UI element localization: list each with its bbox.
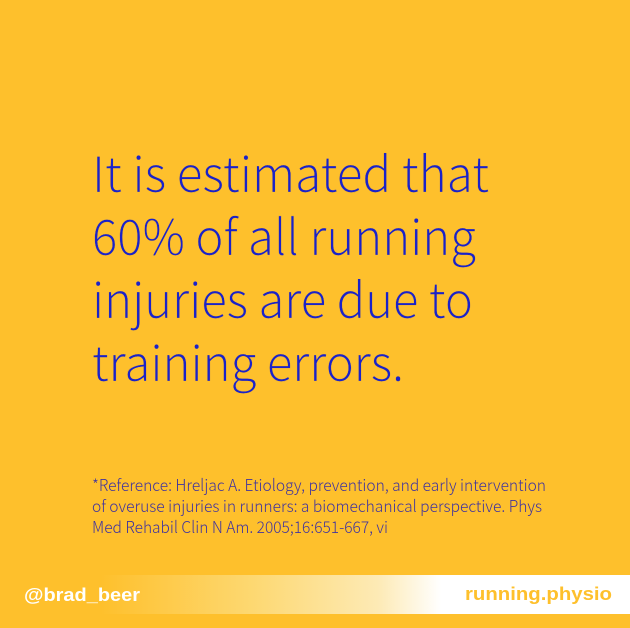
reference text: Med Rehabil Clin N Am. 2005;16:651-667, vi [92,514,388,538]
reference text: *Reference: Hreljac A. Etiology, prevention, and early intervention [92,472,546,496]
reference text: of overuse injuries in runners: a biomechanical perspective. Phys [92,493,542,517]
headline: 60% of all running [92,199,476,270]
reference text [92,472,546,538]
headline [92,136,489,396]
headline: It is estimated that [92,136,489,207]
website: running.physio [465,583,612,604]
headline: injuries are due to [92,262,473,333]
handle: @brad_beer [24,584,140,605]
footer band [0,575,630,614]
headline: training errors. [92,325,404,396]
